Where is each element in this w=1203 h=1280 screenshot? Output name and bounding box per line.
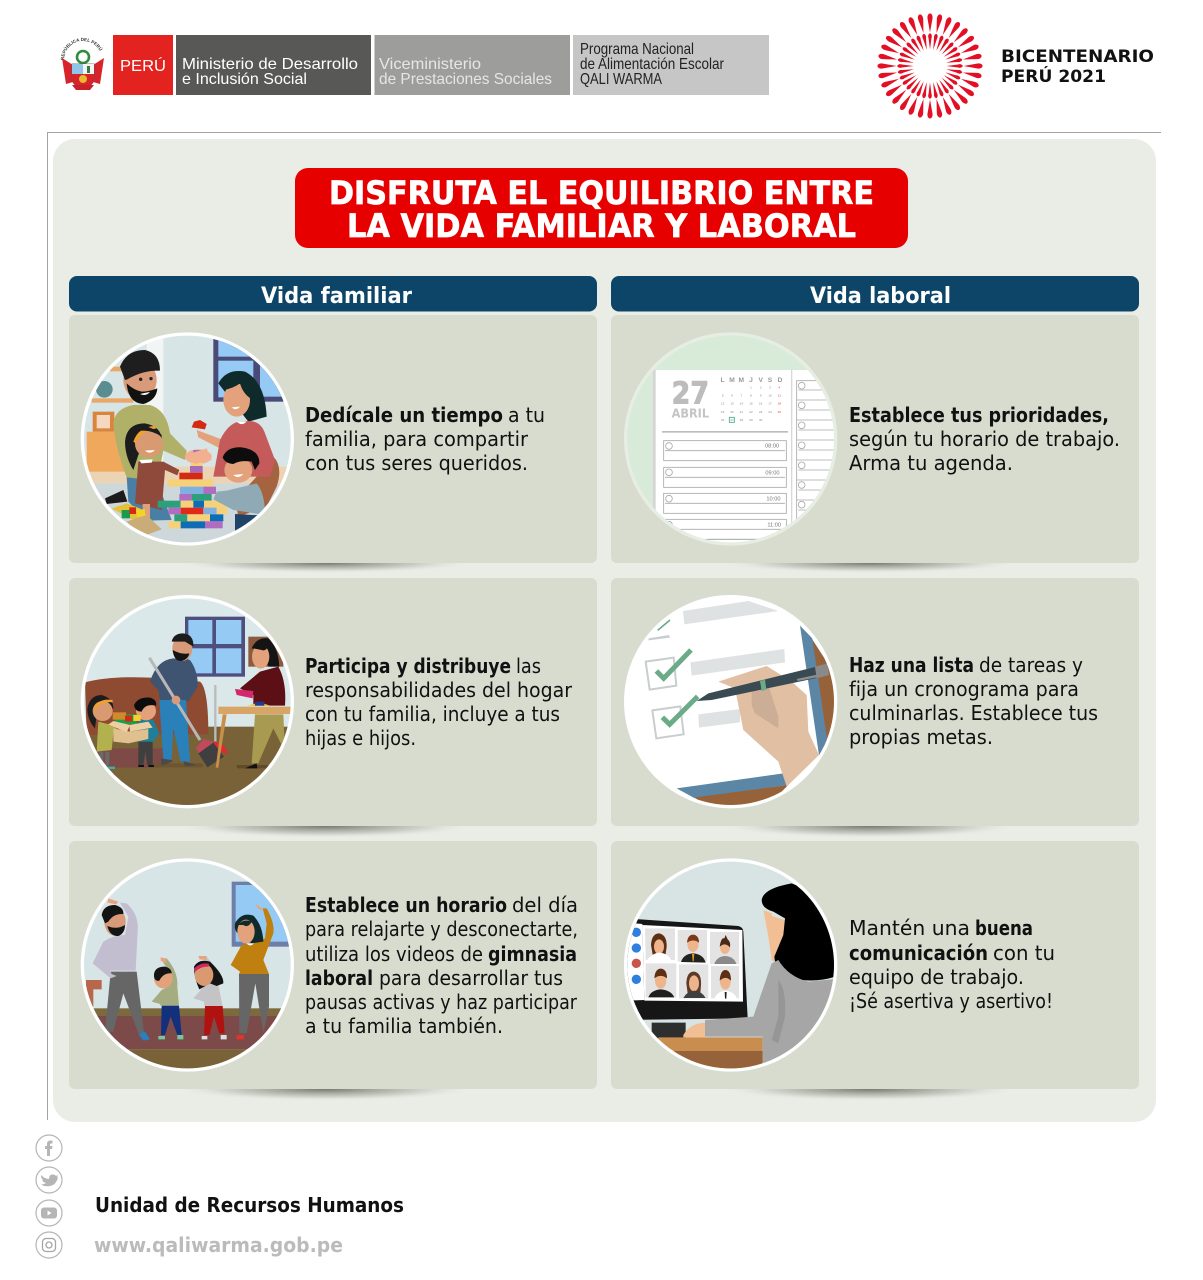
title (295, 168, 908, 248)
illustration: agenda page: 7 (740, 394, 742, 398)
logo: Viceministerio box: de Prestaciones Sociales (379, 71, 552, 88)
illustration: agenda page: V (758, 377, 763, 384)
illustration: agenda page: 22 (749, 410, 753, 414)
text: dedícale un tiempo: con tus seres queridos. (305, 451, 528, 475)
logo: Ministerio box: e Inclusión Social (182, 71, 307, 88)
illustration: hand writing checklist (624, 595, 838, 808)
panel: establece un horario (69, 841, 597, 1090)
illustration: agenda page: L (721, 377, 725, 384)
illustration: agenda page: M (729, 377, 735, 384)
main panel (53, 139, 1156, 1122)
text: haz una lista: propias metas. (849, 725, 993, 749)
text: haz una lista: fija un cronograma para (849, 677, 1079, 701)
text: haz una lista: culminarlas. Establece tus (849, 701, 1098, 725)
panel: participa y distribuye (69, 578, 597, 826)
logo: Ministerio box: Ministerio de Desarrollo (182, 56, 358, 73)
text: dedícale un tiempo: a tu (508, 403, 545, 427)
text: participa y distribuye: con tu familia, incluye a tus (305, 702, 560, 726)
title: DISFRUTA EL EQUILIBRIO ENTRE (329, 174, 874, 212)
illustration: family cleaning home (80, 595, 294, 808)
text: establece tus prioridades (849, 403, 1120, 475)
illustration: family exercising (80, 858, 294, 1072)
illustration: agenda page: 08:00 (765, 444, 779, 450)
illustration: woman on video call (624, 858, 838, 1072)
logo: Viceministerio box: Viceministerio (379, 56, 481, 73)
text: establece un horario: utiliza los videos de (305, 942, 483, 966)
text: participa y distribuye: responsabilidades del hogar (305, 678, 573, 702)
illustration: agenda page: 19 (721, 410, 725, 414)
text: establece un horario: para relajarte y desconectarte, (305, 917, 578, 941)
illustration: agenda page: 14 (740, 402, 743, 406)
text: dedícale un tiempo: Dedícale un tiempo (305, 403, 503, 427)
illustration: agenda page: 1 (750, 385, 752, 389)
logo: bicentenario text: PERÚ 2021 (1001, 67, 1106, 86)
text: establece un horario: para desarrollar tus (379, 966, 563, 990)
panel: buena comunicación (611, 841, 1139, 1090)
illustration: agenda page: 15 (749, 402, 753, 406)
icon: twitter (36, 1167, 62, 1193)
column heading: Vida laboral: Vida laboral (810, 284, 951, 309)
illustration: agenda page: 25 (778, 410, 781, 414)
text: establece un horario: del día (512, 893, 578, 917)
logo: Programa Nacional box: QALI WARMA (580, 71, 662, 88)
illustration: agenda page (624, 332, 838, 546)
illustration: agenda page: 4 (778, 385, 780, 389)
panel: dedícale un tiempo (69, 315, 597, 563)
illustration: agenda page: 27 (730, 418, 734, 422)
logo: coat of arms (60, 38, 104, 90)
text: buena comunicación: comunicación (849, 941, 988, 965)
panel: haz una lista (611, 578, 1139, 826)
text: participa y distribuye: hijas e hijos. (305, 726, 416, 750)
illustration: agenda page: 12 (721, 402, 725, 406)
logo: bicentenario text: BICENTENARIO (1001, 47, 1154, 66)
text: establece un horario: laboral (305, 966, 373, 990)
illustration: agenda page: 8 (750, 394, 752, 398)
icon: instagram (36, 1232, 62, 1258)
text: establece un horario: gimnasia (488, 942, 577, 966)
illustration: agenda page: J (749, 377, 753, 384)
logo: bicentenario sun (877, 13, 983, 119)
illustration: agenda page: M (739, 377, 745, 384)
icon: facebook (36, 1135, 62, 1161)
text: haz una lista: de tareas y (979, 653, 1083, 677)
logo: coat of arms: REPÚBLICA DEL PERÚ (60, 38, 103, 60)
text: establece un horario: a tu familia también. (305, 1014, 503, 1038)
text: buena comunicación: equipo de trabajo. (849, 965, 1024, 989)
logo: PERÚ box: PERÚ (120, 56, 166, 75)
icon: youtube (36, 1200, 62, 1226)
card shadows (175, 553, 1020, 1101)
logo: PERÚ box (113, 35, 173, 95)
title: LA VIDA FAMILIAR Y LABORAL (347, 207, 856, 245)
text: establece tus prioridades: según tu horario de trabajo. (849, 427, 1120, 451)
frame lines (48, 132, 1161, 1120)
illustration: agenda page: 11 (778, 394, 781, 398)
illustration: agenda page: 28 (740, 418, 743, 422)
text: dedícale un tiempo (305, 403, 545, 475)
text: dedícale un tiempo: familia, para compartir (305, 427, 529, 451)
illustration: family playing with blocks (80, 332, 294, 546)
illustration: agenda page: 23 (759, 410, 763, 414)
illustration: agenda page: 2 (760, 385, 762, 389)
illustration: agenda page: 17 (768, 402, 772, 406)
text: participa y distribuye: las (516, 654, 541, 678)
logo: Ministerio box (176, 35, 371, 95)
column heading: Vida laboral (611, 276, 1139, 312)
panel: establece tus prioridades (611, 315, 1139, 563)
logo: Programa Nacional box: de Alimentación Escolar (580, 56, 725, 73)
text: establece tus prioridades: Establece tus prioridades, (849, 403, 1109, 427)
illustration: agenda page: 20 (730, 410, 734, 414)
illustration: agenda page: 11:00 (767, 523, 781, 529)
illustration: agenda page: 16 (759, 402, 763, 406)
illustration: agenda page: ABRIL (672, 406, 709, 420)
text: buena comunicación: ¡Sé asertiva y asertivo! (849, 989, 1053, 1013)
text: buena comunicación: con tu (993, 941, 1055, 965)
text: participa y distribuye: Participa y distribuye (305, 654, 511, 678)
footer: website: www.qaliwarma.gob.pe (94, 1233, 343, 1257)
text: establece tus prioridades: Arma tu agenda. (849, 451, 1013, 475)
illustration: agenda page: 29 (749, 418, 753, 422)
text: buena comunicación: Mantén una (849, 916, 970, 940)
text: establece un horario: Establece un horario (305, 893, 507, 917)
text: establece un horario: pausas activas y haz participar (305, 990, 578, 1014)
text: establece un horario (305, 893, 578, 1038)
illustration: agenda page: 21 (740, 410, 743, 414)
illustration: agenda page: 10:00 (766, 497, 780, 503)
illustration: agenda page: S (768, 377, 773, 384)
illustration: agenda page: 9 (760, 394, 762, 398)
illustration: agenda page: 10 (768, 394, 772, 398)
illustration: agenda page: 26 (721, 418, 725, 422)
text: buena comunicación (849, 916, 1055, 1013)
logo: Programa Nacional box (573, 35, 769, 95)
footer: unit name: Unidad de Recursos Humanos (95, 1193, 404, 1217)
text: buena comunicación: buena (975, 916, 1033, 940)
illustration: agenda page: 18 (778, 402, 781, 406)
text: participa y distribuye (305, 654, 573, 750)
logo: Programa Nacional box: Programa Nacional (580, 41, 694, 58)
illustration: agenda page: 24 (768, 410, 772, 414)
illustration: agenda page: 13 (730, 402, 734, 406)
illustration: agenda page: 09:00 (765, 470, 779, 476)
illustration: agenda page: 6 (731, 394, 733, 398)
illustration: agenda page: 27 (672, 376, 709, 411)
illustration: agenda page: 3 (769, 385, 771, 389)
logo: Viceministerio box (374, 35, 570, 95)
column heading: Vida familiar (69, 276, 597, 312)
column heading: Vida familiar: Vida familiar (261, 284, 412, 309)
illustration: agenda page: D (778, 377, 783, 384)
text: haz una lista: Haz una lista (849, 653, 974, 677)
logo: bicentenario text (1001, 47, 1154, 86)
illustration: agenda page: 5 (722, 394, 724, 398)
text: haz una lista (849, 653, 1098, 749)
illustration: agenda page: 30 (759, 418, 763, 422)
